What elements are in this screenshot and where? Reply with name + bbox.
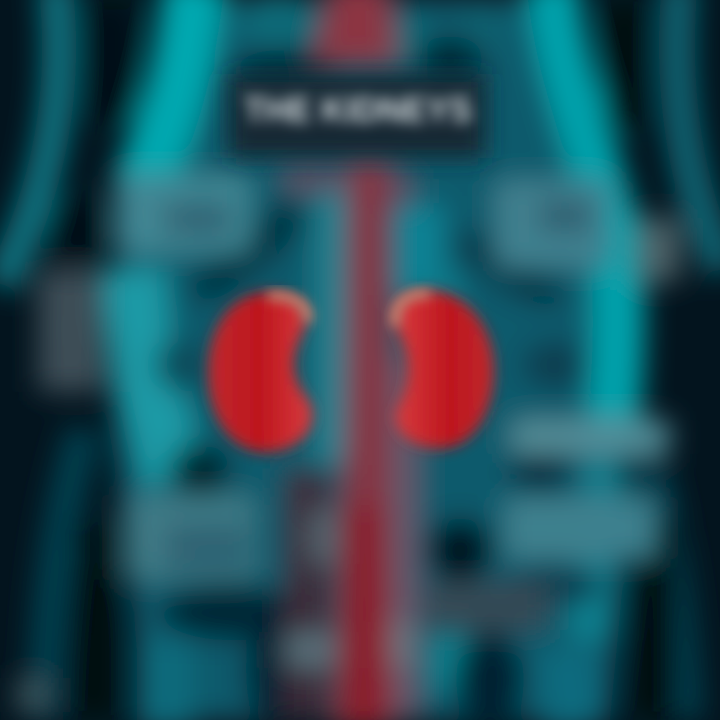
text block: upper left: Blood cleaning <box>125 217 204 231</box>
text block: lower right top <box>512 420 670 454</box>
text block: right side: Vein <box>642 246 661 257</box>
text block: lower right: Blood pressure <box>512 530 599 545</box>
left kidney <box>208 292 313 452</box>
text block: upper left <box>115 175 250 253</box>
text block: lower centre: Ureter <box>430 599 463 613</box>
kidney highlight <box>268 296 308 322</box>
text block: lower right top: Fluid balance <box>522 431 599 446</box>
text block: left side: Renal <box>44 311 73 323</box>
dark organ areas <box>156 205 668 720</box>
bright teal bands <box>135 0 619 720</box>
small corner mark <box>16 678 48 712</box>
right kidney <box>395 290 494 449</box>
text block: right side <box>636 218 680 282</box>
text block: lower right <box>505 497 655 559</box>
left body outline <box>0 0 85 720</box>
spine side glow <box>268 175 476 690</box>
torso base <box>111 0 636 720</box>
text block: upper right: Waste removal <box>505 200 591 215</box>
kidney highlight <box>395 294 430 326</box>
right body outline <box>650 0 720 720</box>
text block: left side: artery <box>44 336 73 348</box>
upper torso mid tones <box>233 0 504 86</box>
text block: upper right <box>495 180 610 268</box>
top blood vessel <box>314 0 396 62</box>
text block: left side <box>38 270 104 392</box>
title text: THE KIDNEYS <box>244 89 472 130</box>
text block: lower left <box>125 495 255 580</box>
text block: lower right: Urine production <box>512 506 607 521</box>
kidney body <box>395 290 494 449</box>
text block: lower centre <box>422 582 548 630</box>
title panel <box>228 74 486 158</box>
lower side vessels <box>285 168 417 720</box>
text block: upper left: Filtration <box>125 192 179 208</box>
kidney body <box>208 292 313 452</box>
text block: lower left: Electrolyte <box>133 513 194 528</box>
text block: lower left: balance <box>133 538 179 553</box>
title <box>228 74 486 158</box>
aorta <box>336 160 392 720</box>
